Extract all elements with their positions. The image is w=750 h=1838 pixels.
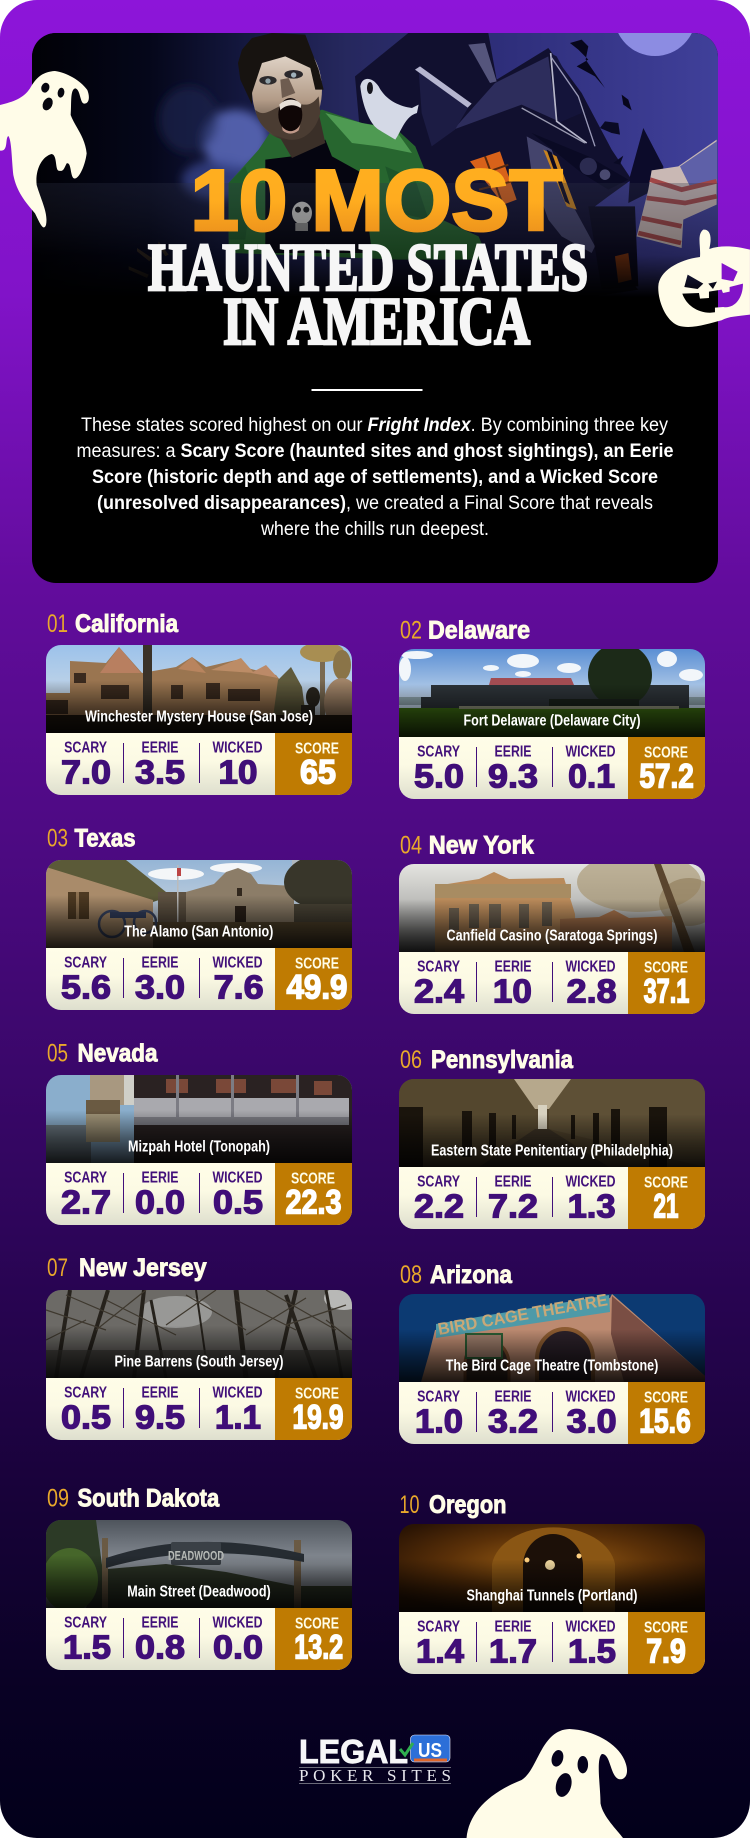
- caption: The Bird Cage Theatre (Tombstone): [446, 1358, 658, 1375]
- stats row: 0.1: [568, 757, 615, 794]
- heading: 06 Pennsylvania: 06: [400, 1046, 422, 1074]
- photo: Shanghai Tunnels: [399, 1524, 705, 1612]
- card: 02 Delaware: [399, 616, 705, 799]
- intro paragraph: where the chills run deepest.: [260, 519, 489, 540]
- stats row: [399, 1167, 705, 1229]
- logo: Legal US Poker Sites: LEGAL: [299, 1733, 408, 1770]
- stats row: [46, 1608, 352, 1670]
- stats row: 1.5: [63, 1628, 111, 1665]
- stats row: [399, 952, 705, 1014]
- stats row: WICKED: [566, 744, 616, 761]
- caption: Shanghai Tunnels (Portland): [466, 1588, 638, 1605]
- photo: Canfield Casino: [399, 864, 705, 952]
- stats row: 3.0: [135, 968, 185, 1005]
- stats row: EERIE: [142, 1385, 179, 1402]
- stats row: 22.3: [286, 1183, 342, 1221]
- heading: 08 Arizona: [400, 1261, 513, 1289]
- card: 09 South Dakota: [42, 1485, 352, 1670]
- stats row: 2.4: [414, 972, 465, 1009]
- arch lettering: DEADWOOD: [168, 1548, 224, 1563]
- stats row: 10: [218, 753, 258, 790]
- card: 08 Arizona: [399, 1261, 705, 1444]
- stats row: 15.6: [639, 1402, 691, 1440]
- heading: 10 Oregon: 10: [400, 1491, 420, 1519]
- stats row: EERIE: [142, 1615, 179, 1632]
- card: 07 New Jersey: [46, 1254, 364, 1440]
- stats row: WICKED: [212, 1385, 262, 1402]
- stats row: SCARY: [417, 959, 460, 976]
- card: 05 Nevada: [46, 1040, 352, 1225]
- stats row: SCORE: [644, 1389, 688, 1406]
- intro paragraph: (unresolved disappearances), we created a Final Score that reveals: [97, 493, 653, 514]
- stats row: SCARY: [64, 1170, 107, 1187]
- photo: The Alamo: [46, 860, 352, 948]
- photo: Fort Delaware: [399, 643, 705, 737]
- stats row: SCORE: [291, 1170, 335, 1187]
- heading: 10 Oregon: [400, 1491, 506, 1519]
- intro paragraph: measures: a Scary Score (haunted sites and ghost sightings), an Eerie: [76, 441, 674, 462]
- stats row: 2.2: [414, 1187, 464, 1224]
- stats row: 49.9: [286, 968, 348, 1006]
- stats row: 1.4: [416, 1632, 465, 1669]
- heading: 01 California: 01: [47, 610, 68, 638]
- stats row: EERIE: [142, 1170, 179, 1187]
- caption: Main Street (Deadwood): [127, 1584, 271, 1601]
- stats row: EERIE: [142, 740, 179, 757]
- caption: Fort Delaware (Delaware City): [464, 713, 640, 730]
- stats row: 7.2: [488, 1187, 538, 1224]
- caption: The Alamo (San Antonio): [124, 924, 273, 941]
- stats row: 13.2: [294, 1628, 343, 1666]
- caption: Eastern State Penitentiary (Philadelphia): [431, 1143, 673, 1160]
- sign lettering: BIRD CAGE THEATRE: [436, 1290, 609, 1339]
- stats row: 2.8: [567, 972, 617, 1009]
- photo: Main Street Deadwood: [42, 1520, 352, 1612]
- stats row: 21: [654, 1187, 678, 1225]
- intro paragraph: [76, 415, 674, 540]
- stats row: SCORE: [295, 740, 339, 757]
- stats row: 0.5: [213, 1183, 263, 1220]
- stats row: 37.1: [644, 972, 689, 1010]
- heading: 04 New York: 04: [400, 831, 422, 859]
- photo: Mizpah Hotel: [46, 1075, 352, 1163]
- stats row: 0.8: [135, 1628, 185, 1665]
- hero illustration: haunted house and screaming man: [32, 33, 718, 294]
- intro paragraph: Score (historic depth and age of settlements), and a Wicked Score: [92, 467, 658, 488]
- caption: Pine Barrens (South Jersey): [114, 1354, 284, 1371]
- stats row: WICKED: [566, 959, 616, 976]
- stats row: 57.2: [639, 757, 694, 795]
- card: 10 Oregon: [399, 1491, 705, 1674]
- stats row: 19.9: [292, 1398, 344, 1436]
- logo: Legal US Poker Sites: US: [418, 1740, 442, 1762]
- title: 10 MOST: 10 MOST: [190, 153, 562, 249]
- stats row: 9.3: [488, 757, 538, 794]
- stats row: WICKED: [566, 1174, 616, 1191]
- stats row: SCARY: [417, 1174, 460, 1191]
- stats row: SCORE: [295, 1615, 339, 1632]
- stats row: WICKED: [212, 955, 262, 972]
- stats row: EERIE: [494, 744, 532, 761]
- stats row: EERIE: [494, 1619, 532, 1636]
- caption: Winchester Mystery House (San Jose): [85, 709, 313, 726]
- logo: Legal US Poker Sites: POKER SITES: [299, 1766, 451, 1785]
- stats row: SCARY: [417, 1389, 460, 1406]
- heading: 06 Pennsylvania: Pennsylvania: [431, 1046, 574, 1074]
- photo: Pine Barrens: [46, 1286, 364, 1378]
- stats row: WICKED: [212, 1615, 262, 1632]
- photo: Bird Cage Theatre: [399, 1290, 705, 1382]
- heading: 05 Nevada: [47, 1040, 158, 1068]
- card: 03 Texas: [46, 825, 368, 1010]
- logo: Legal US Poker Sites: [299, 1733, 451, 1785]
- stats row: 0.0: [213, 1628, 263, 1665]
- stats row: SCORE: [295, 1385, 339, 1402]
- stats row: [46, 1378, 352, 1440]
- title: IN AMERICA: IN AMERICA: [223, 283, 530, 359]
- stats row: [399, 1382, 705, 1444]
- heading: 09 South Dakota: South Dakota: [78, 1485, 220, 1513]
- card: 04 New York: [399, 831, 719, 1014]
- stats row: 65: [300, 753, 336, 791]
- heading: 08 Arizona: Arizona: [430, 1261, 513, 1289]
- stats row: [399, 737, 705, 799]
- stats row: 3.0: [567, 1402, 617, 1439]
- heading: 01 California: California: [75, 610, 179, 638]
- stats row: 5.6: [61, 968, 111, 1005]
- stats row: 3.5: [135, 753, 185, 790]
- photo: Winchester Mystery House: [46, 642, 360, 733]
- stats row: [46, 1163, 352, 1225]
- stats row: 5.0: [414, 757, 464, 794]
- stats row: 1.1: [215, 1398, 261, 1435]
- stats row: SCORE: [644, 1174, 688, 1191]
- stats row: 10: [493, 972, 532, 1009]
- stats row: 1.0: [415, 1402, 463, 1439]
- stats row: SCARY: [64, 740, 107, 757]
- heading: 03 Texas: 03: [47, 825, 68, 853]
- stats row: SCORE: [644, 959, 688, 976]
- stats row: SCORE: [644, 1619, 688, 1636]
- stats row: EERIE: [494, 959, 532, 976]
- intro paragraph: These states scored highest on our Fright Index. By combining three key: [81, 415, 668, 436]
- title: HAUNTED STATES: HAUNTED STATES: [148, 229, 588, 305]
- stats row: EERIE: [494, 1174, 532, 1191]
- stats row: [46, 733, 352, 795]
- stats row: EERIE: [142, 955, 179, 972]
- stats row: 2.7: [61, 1183, 111, 1220]
- heading: 10 Oregon: Oregon: [429, 1491, 506, 1519]
- heading: 03 Texas: [47, 825, 136, 853]
- stats row: SCORE: [644, 744, 688, 761]
- stats row: SCARY: [64, 1385, 107, 1402]
- stats row: 1.3: [568, 1187, 616, 1224]
- stats row: WICKED: [566, 1389, 616, 1406]
- heading: 08 Arizona: 08: [400, 1261, 422, 1289]
- stats row: 7.6: [214, 968, 264, 1005]
- icon: pumpkin right: [658, 230, 750, 327]
- stats row: 0.0: [135, 1183, 185, 1220]
- heading: 03 Texas: Texas: [74, 825, 136, 853]
- stats row: 3.2: [488, 1402, 538, 1439]
- stats row: WICKED: [566, 1619, 616, 1636]
- stats row: 7.9: [646, 1632, 686, 1670]
- stats row: EERIE: [494, 1389, 532, 1406]
- stats row: SCARY: [64, 955, 107, 972]
- heading: 05 Nevada: Nevada: [78, 1040, 158, 1068]
- heading: 02 Delaware: Delaware: [428, 616, 530, 644]
- stats row: SCARY: [417, 1619, 460, 1636]
- stats row: 9.5: [135, 1398, 185, 1435]
- caption: Mizpah Hotel (Tonopah): [128, 1139, 270, 1156]
- stats row: 7.0: [61, 753, 111, 790]
- heading: 05 Nevada: 05: [47, 1040, 68, 1068]
- panel: hero intro: [32, 0, 718, 583]
- heading: 09 South Dakota: 09: [47, 1485, 69, 1513]
- stats row: SCARY: [417, 744, 460, 761]
- heading: 04 New York: New York: [429, 831, 534, 859]
- stats row: [46, 948, 352, 1010]
- icon: ghost bottom right: [467, 1729, 627, 1838]
- caption: Canfield Casino (Saratoga Springs): [446, 928, 658, 945]
- stats row: 1.5: [568, 1632, 616, 1669]
- photo: Eastern State Penitentiary: [399, 1079, 705, 1167]
- card: 06 Pennsylvania: [399, 1046, 705, 1229]
- heading: 02 Delaware: 02: [400, 616, 422, 644]
- stats row: 0.5: [61, 1398, 111, 1435]
- stats row: WICKED: [212, 1170, 262, 1187]
- heading: 07 New Jersey: 07: [47, 1254, 68, 1282]
- stats row: [399, 1612, 705, 1674]
- stats row: SCARY: [64, 1615, 107, 1632]
- heading: 07 New Jersey: New Jersey: [79, 1254, 207, 1282]
- card: 01 California: [46, 610, 360, 795]
- stats row: SCORE: [295, 955, 339, 972]
- icon: ghost top left: [0, 71, 89, 227]
- stats row: WICKED: [212, 740, 262, 757]
- stats row: 1.7: [489, 1632, 537, 1669]
